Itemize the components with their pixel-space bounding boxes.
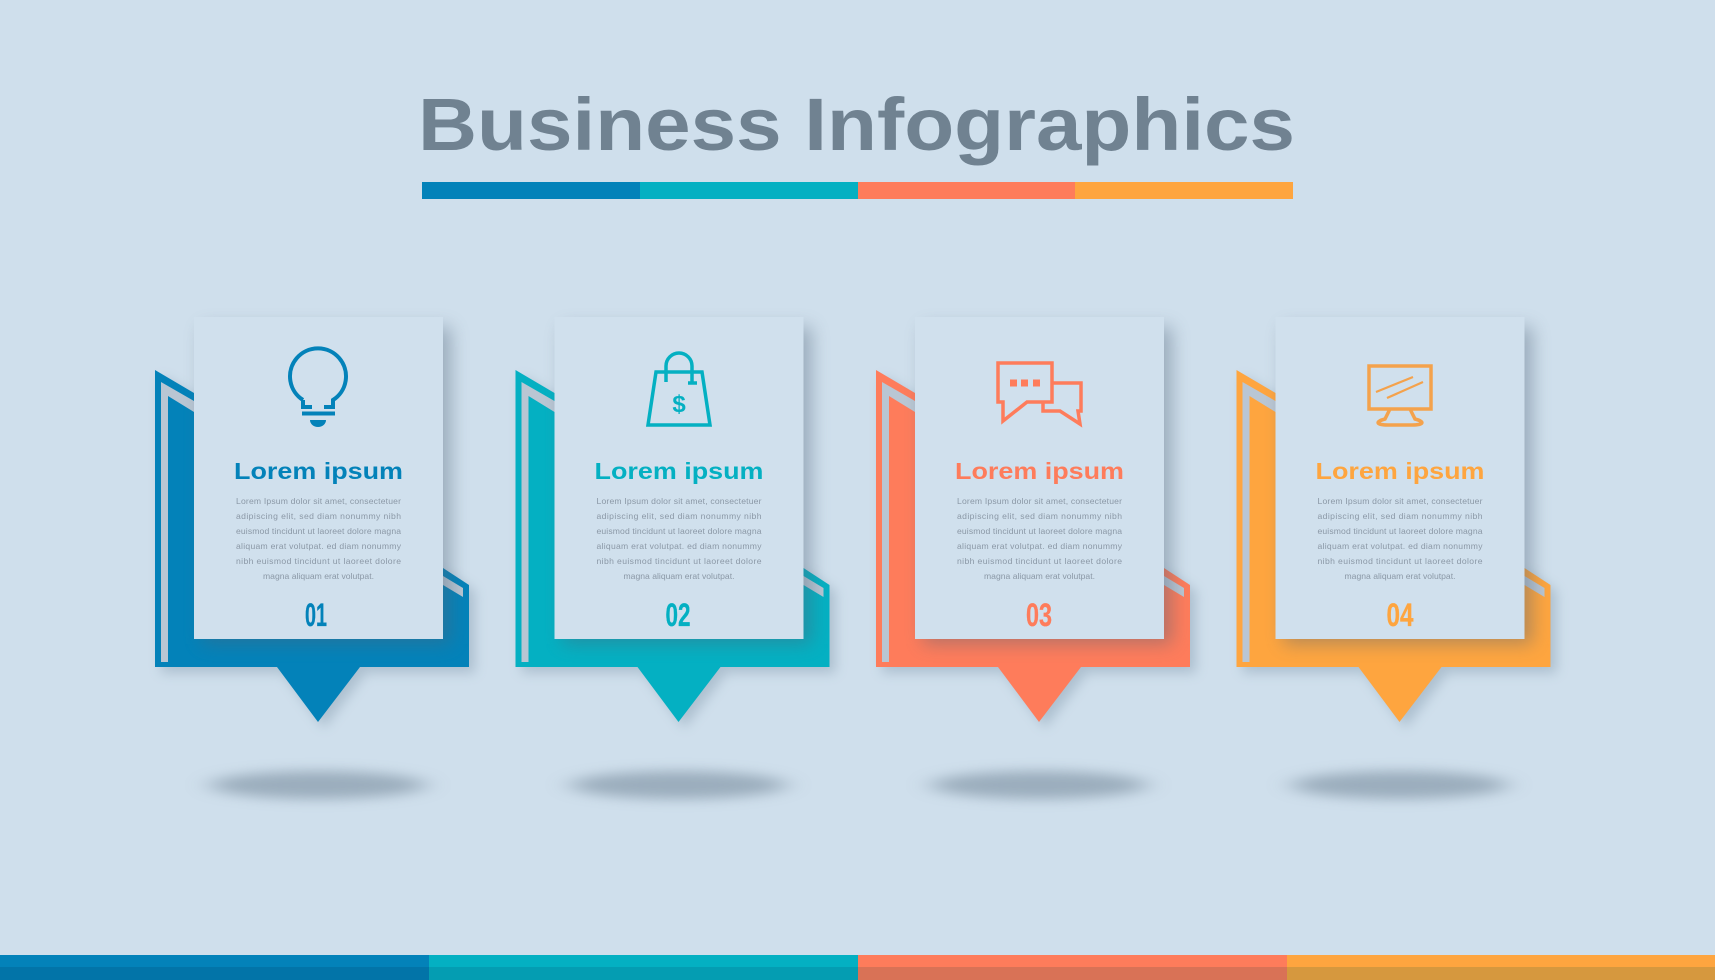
body text 01: nibh euismod tincidunt ut laoreet dolore [236, 556, 401, 566]
title colour bar [422, 182, 1293, 199]
body text 03: adipiscing elit, sed diam nonummy nibh [957, 511, 1122, 521]
card 04 [1276, 317, 1532, 644]
card 02 [554, 317, 812, 644]
body text 03: nibh euismod tincidunt ut laoreet dolore [957, 556, 1122, 566]
heading 02: Lorem ipsum [594, 458, 764, 484]
body text 03: Lorem Ipsum dolor sit amet, consectetuer [957, 496, 1122, 506]
icon: chat bubbles [998, 363, 1081, 424]
panel: step 02 [516, 317, 836, 799]
panel: step 03 [876, 317, 1196, 799]
body text 04: nibh euismod tincidunt ut laoreet dolore [1318, 556, 1483, 566]
card 01 [194, 317, 451, 644]
icon: shopping bag [648, 353, 710, 425]
heading 03: Lorem ipsum [955, 458, 1124, 484]
body text 01: Lorem Ipsum dolor sit amet, consectetuer [236, 496, 401, 506]
body text 03 [957, 496, 1123, 581]
icon: shopping bag: $ [672, 391, 686, 418]
title: Business Infographics [418, 83, 1295, 166]
floating shadow 04 [1292, 771, 1508, 799]
body text 02: adipiscing elit, sed diam nonummy nibh [596, 511, 762, 521]
icon: monitor [1369, 366, 1431, 425]
number 04: 04 [1386, 597, 1414, 633]
pin shape 04 [1236, 370, 1556, 728]
icon: light bulb [290, 348, 346, 427]
body text 03: aliquam erat volutpat. ed diam nonummy [957, 541, 1123, 551]
heading 04: Lorem ipsum [1316, 458, 1484, 484]
body text 02: Lorem Ipsum dolor sit amet, consectetuer [596, 496, 762, 506]
floating shadow 01 [210, 771, 426, 799]
body text 04: adipiscing elit, sed diam nonummy nibh [1318, 511, 1483, 521]
panel: step 01 [155, 317, 475, 799]
body text 04: Lorem Ipsum dolor sit amet, consectetuer [1318, 496, 1483, 506]
panel: step 04 [1236, 317, 1556, 799]
floating shadow 02 [570, 771, 786, 799]
body text 01: euismod tincidunt ut laoreet dolore magna [236, 526, 401, 536]
body text 04: aliquam erat volutpat. ed diam nonummy [1318, 541, 1483, 551]
body text 02: nibh euismod tincidunt ut laoreet dolore [596, 556, 762, 566]
body text 01: adipiscing elit, sed diam nonummy nibh [236, 511, 401, 521]
footer colour band [0, 955, 1715, 980]
pin shape 01 [155, 370, 475, 728]
pin shape 03 [876, 370, 1196, 728]
body text 04: magna aliquam erat volutpat. [1344, 571, 1456, 581]
number 01: 01 [305, 597, 327, 633]
floating shadow 03 [931, 771, 1147, 799]
body text 02: euismod tincidunt ut laoreet dolore magna [596, 526, 762, 536]
body text 03: euismod tincidunt ut laoreet dolore magna [957, 526, 1122, 536]
body text 01: magna aliquam erat volutpat. [263, 571, 374, 581]
number 02: 02 [666, 597, 690, 633]
body text 02: aliquam erat volutpat. ed diam nonummy [596, 541, 762, 551]
body text 03: magna aliquam erat volutpat. [984, 571, 1095, 581]
number 03: 03 [1026, 597, 1052, 633]
card 03 [915, 317, 1172, 644]
body text 02: magna aliquam erat volutpat. [624, 571, 734, 581]
body text 04 [1318, 496, 1483, 581]
body text 01 [236, 496, 402, 581]
heading 01: Lorem ipsum [234, 458, 403, 484]
body text 02 [596, 496, 762, 581]
pin shape 02 [516, 370, 836, 728]
body text 04: euismod tincidunt ut laoreet dolore magna [1318, 526, 1483, 536]
body text 01: aliquam erat volutpat. ed diam nonummy [236, 541, 402, 551]
